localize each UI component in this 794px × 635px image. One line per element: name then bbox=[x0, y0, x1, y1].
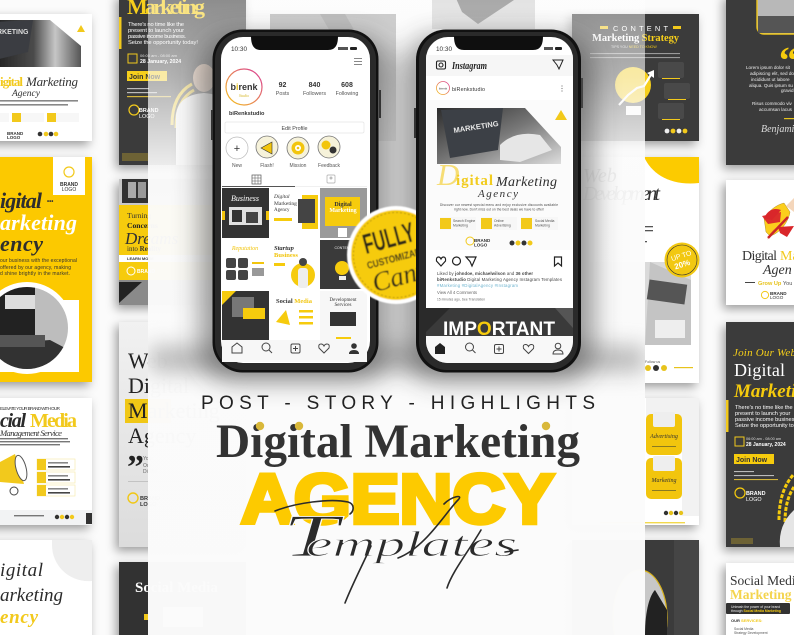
card: advertising and marketing post bbox=[572, 398, 699, 525]
card: rocket growth post: Agen bbox=[762, 263, 792, 278]
card: rocket growth post: Digital bbox=[742, 249, 777, 264]
card: rocket growth post: BRAND bbox=[770, 291, 787, 296]
badge: up to 20%: UP TO bbox=[670, 250, 693, 263]
story highlights: Mission bbox=[290, 163, 307, 169]
brand logo and social dots bbox=[466, 237, 532, 248]
card: web digital marketing agency story: ” bbox=[127, 449, 144, 486]
grid post 3: Marketing bbox=[329, 208, 357, 214]
badge: fully customizable canva: FULLY bbox=[360, 216, 418, 260]
status bar: 10:30 bbox=[231, 46, 247, 53]
card: join our webinar story: passive income busines bbox=[735, 417, 794, 423]
badge: fully customizable canva bbox=[347, 206, 445, 304]
service chips: Advertising bbox=[494, 224, 511, 228]
status bar bbox=[436, 46, 562, 51]
grid post 9: Development bbox=[330, 298, 357, 303]
faded center backdrop cards bbox=[270, 0, 535, 141]
post photo: laptop and hands: MARKETING bbox=[453, 119, 499, 135]
icon: menu bbox=[354, 58, 362, 65]
service chips: Search Engine bbox=[453, 219, 475, 223]
card: content marketing strategy post: TIPS YOU NEED TO KNOW bbox=[611, 45, 657, 49]
grid post 9: Services bbox=[335, 303, 352, 308]
post caption: Liked by johndoe, michaelwilson and 36 other bbox=[437, 271, 533, 276]
card: yellow agency story: our business with the exceptional bbox=[0, 258, 77, 264]
card: yellow agency story: ency bbox=[0, 231, 43, 256]
post caption: biRenkstudio Digital Marketing Agency Instagram Templates bbox=[437, 277, 562, 282]
phone notch bbox=[454, 36, 543, 50]
card: social media marketing story: Unleash the power of your brand bbox=[731, 605, 780, 609]
card: advertising and marketing post: Marketing bbox=[650, 478, 676, 484]
card: webinar story top: There's no time like the bbox=[128, 22, 184, 28]
card: join our webinar story: There's no time like the bbox=[735, 405, 793, 411]
card: webinar story top: present to launch your bbox=[128, 28, 184, 34]
grid post 4 bbox=[222, 240, 269, 289]
card: testimonial post: incididunt ut labore bbox=[751, 77, 790, 82]
post artwork bbox=[436, 108, 567, 246]
post body text: Discover our newest special menu and enjoy exclusive discounts available bbox=[440, 203, 558, 207]
card: webinar story top bbox=[119, 0, 246, 165]
post caption: 15 minutes ago, See Translation bbox=[437, 298, 485, 302]
post body text: right now. Don't miss out on the best deals we have to offer! bbox=[454, 208, 544, 212]
card: rocket growth post: LOGO bbox=[770, 295, 784, 300]
card: webinar story top: 06:00 am - 08:00 am bbox=[140, 53, 178, 58]
card: join our webinar story: 06:00 am - 08:00 am bbox=[746, 437, 781, 441]
grid post 6 bbox=[320, 240, 367, 289]
card: content marketing strategy post bbox=[572, 14, 699, 141]
grid post 2: Agency bbox=[274, 208, 290, 213]
post headline: D bbox=[436, 157, 459, 192]
card: web digital marketing agency story: Your bbox=[143, 456, 153, 462]
card: rocket growth post bbox=[726, 180, 794, 305]
phone: instagram profile bbox=[211, 30, 381, 372]
card: web digital marketing agency story: BRAND bbox=[140, 496, 160, 502]
profile stats: 608 bbox=[341, 82, 353, 89]
brand logo and social dots: LOGO bbox=[474, 242, 488, 248]
card: testimonial post bbox=[726, 0, 794, 165]
instagram header bar bbox=[426, 55, 573, 76]
grid post 8 bbox=[271, 291, 318, 340]
card: web digital marketing agency story: Digital bbox=[128, 373, 189, 398]
icon: yellow triangle logo bbox=[555, 110, 567, 120]
card: web digital marketing agency story: Our bbox=[143, 463, 152, 469]
card: webinar story top: passive income business. bbox=[128, 34, 186, 40]
card: join our webinar story: BRAND bbox=[746, 491, 766, 497]
phone shadows bbox=[150, 36, 645, 381]
post actions bbox=[436, 257, 562, 266]
service chips: Marketing bbox=[453, 224, 468, 228]
card: join our webinar story: 28 January, 2024 bbox=[746, 442, 786, 448]
card: web development story bbox=[572, 157, 699, 383]
card: join our webinar story bbox=[726, 322, 794, 547]
profile name: biRenkstudio bbox=[229, 111, 265, 117]
center white overlay panel bbox=[148, 0, 645, 635]
card: social media service post: Management Service bbox=[0, 428, 62, 438]
badge: fully customizable canva: CUSTOMIZABLE bbox=[366, 244, 433, 272]
grid post 5: Startup bbox=[274, 245, 295, 252]
profile stats: Posts bbox=[276, 91, 290, 97]
instagram post grid bbox=[222, 188, 367, 340]
card: white agency story: arketing bbox=[0, 585, 63, 606]
card: web digital marketing agency story: LOGO bbox=[140, 502, 157, 508]
grid post 1: Business bbox=[231, 194, 259, 203]
card: white agency story: ency bbox=[0, 607, 39, 628]
card: yellow agency story: igital bbox=[0, 188, 43, 213]
grid post 6: CONTENT bbox=[335, 246, 352, 250]
story highlights: + bbox=[234, 143, 240, 155]
status bar: 10:30 bbox=[436, 46, 452, 53]
card: webinar story top: LOGO bbox=[139, 114, 155, 120]
heading: post story highlights: POST - STORY - HIGHLIGHTS bbox=[201, 393, 595, 414]
card: web digital marketing agency story: Marketing bbox=[128, 398, 220, 423]
card: social media marketing story: Marketing bbox=[730, 587, 792, 602]
card: social media service post: cial bbox=[0, 410, 26, 432]
icon: rocket bbox=[762, 198, 794, 240]
card: turning concerns post: Concerns bbox=[127, 221, 158, 230]
edit profile button bbox=[225, 122, 364, 133]
card: social media marketing story bbox=[726, 563, 794, 635]
grid post 7 bbox=[222, 291, 269, 340]
card: social media service post: ELEVATE YOUR BRAND WITH OUR bbox=[0, 406, 61, 411]
heading: templates script: emplates bbox=[306, 524, 517, 564]
card: dark portrait post bbox=[572, 540, 699, 635]
bottom navigation bar bbox=[426, 336, 573, 363]
card: social media marketing story: Social Medi bbox=[730, 573, 794, 588]
icon: direct message bbox=[553, 60, 563, 69]
post headline: igital bbox=[456, 173, 493, 189]
card: web development story: Follow us bbox=[645, 360, 660, 364]
badge: fully customizable canva: Canva bbox=[369, 251, 445, 298]
phone: instagram post bbox=[414, 30, 583, 372]
card: yellow agency story bbox=[0, 157, 92, 382]
card: content marketing strategy post: CONTENT bbox=[613, 24, 668, 33]
card: turning concerns post: Dreams bbox=[124, 229, 179, 248]
status bar bbox=[231, 46, 357, 53]
card: turning concerns post: Turning bbox=[127, 211, 151, 220]
card: content marketing strategy post: Marketing Strategy bbox=[592, 33, 680, 44]
icon: camera bbox=[436, 61, 446, 69]
card: yellow agency story: ••• bbox=[47, 199, 53, 205]
instagram wordmark: Instagram bbox=[451, 61, 487, 72]
card: join our webinar story: Join Now bbox=[736, 457, 768, 464]
post author bbox=[436, 82, 563, 94]
story highlights bbox=[226, 136, 340, 169]
card: digital marketing agency post: Marketing bbox=[25, 74, 78, 89]
card: white agency story bbox=[0, 540, 92, 635]
card: join our webinar story: Digital bbox=[734, 360, 785, 380]
service chips: Online bbox=[494, 219, 504, 223]
panel: second column template cards bbox=[119, 0, 246, 635]
profile avatar bbox=[226, 69, 262, 105]
card: webinar story top: Seize the opportunity today! bbox=[128, 40, 198, 46]
heading: digital marketing: Digital Marketing bbox=[216, 415, 580, 468]
grid post 3 bbox=[320, 188, 367, 238]
card: social media marketing story: OUR SERVICES: bbox=[731, 618, 762, 623]
grid post 3: Digital bbox=[334, 202, 352, 208]
heading: templates script bbox=[275, 497, 518, 603]
phone notch bbox=[251, 36, 338, 50]
card: testimonial post: gravid bbox=[781, 88, 794, 93]
card: turning concerns post: BRAND bbox=[137, 269, 155, 275]
grid post 2: Marketing bbox=[274, 201, 297, 207]
grid post 8: Social Media bbox=[276, 298, 313, 305]
card: turning concerns post: LEARN MORE bbox=[127, 256, 154, 261]
card: digital marketing agency post: Agency bbox=[11, 89, 41, 99]
heading: templates script: T bbox=[283, 502, 338, 569]
card: social media marketing story: Social Media bbox=[734, 627, 754, 631]
grid post 4: Reputation bbox=[231, 246, 258, 252]
post caption: View All 4 Comments bbox=[437, 290, 477, 295]
card: web digital marketing agency story: Digital bbox=[143, 469, 157, 475]
profile tabs bbox=[222, 175, 367, 187]
panel: third column template cards bbox=[572, 14, 700, 635]
card: digital marketing agency post: LOGO bbox=[7, 135, 21, 140]
post headline: Agency bbox=[477, 188, 518, 200]
card: turning concerns post bbox=[119, 179, 246, 305]
card: yellow agency story: arketing bbox=[0, 210, 77, 235]
brand logo and social dots: BRAND bbox=[474, 238, 491, 243]
story highlights: New bbox=[232, 163, 242, 169]
grid post 9 bbox=[320, 291, 367, 340]
card: social media service post: Media bbox=[30, 410, 77, 432]
card: testimonial post: Risus commodo viv bbox=[752, 101, 793, 106]
post headline: Marketing bbox=[495, 175, 557, 190]
bottom navigation bar bbox=[222, 340, 367, 362]
profile avatar: Studio bbox=[239, 93, 249, 98]
card: testimonial post: Lorem ipsum dolor sit bbox=[746, 65, 791, 70]
card: join our webinar story: Seize the opportunity to bbox=[735, 423, 794, 429]
profile stats: 92 bbox=[279, 82, 286, 89]
important story strip: IMPORTANT bbox=[443, 319, 555, 340]
edit profile button: Edit Profile bbox=[281, 126, 308, 132]
profile avatar: birenk bbox=[230, 82, 259, 92]
card: dark social media post bbox=[119, 562, 246, 635]
card: yellow agency story: LOGO bbox=[62, 187, 76, 193]
card: social media marketing story: Strategy Development bbox=[734, 631, 768, 635]
card: yellow agency story: offered by our agency, making bbox=[0, 265, 71, 271]
post author: birenk bbox=[439, 86, 448, 90]
profile stats: 840 bbox=[309, 82, 320, 89]
card: digital marketing agency post: igital bbox=[0, 74, 23, 89]
card: advertising and marketing post: Advertising bbox=[649, 434, 678, 440]
card: webinar story top: 28 January, 2024 bbox=[140, 59, 181, 65]
card: dark social media post: Social Media bbox=[135, 580, 218, 596]
service chips bbox=[440, 218, 554, 229]
card: yellow agency story: BRAND bbox=[60, 182, 78, 188]
card: web digital marketing agency story: Web bbox=[128, 348, 168, 373]
card: join our webinar story: LOGO bbox=[746, 497, 762, 503]
grid post 1 bbox=[222, 188, 269, 238]
service chips: Social Media bbox=[535, 219, 555, 223]
post photo: laptop and hands bbox=[437, 108, 561, 164]
card: turning concerns post: into Reality bbox=[127, 245, 162, 253]
post body text bbox=[440, 203, 558, 212]
profile stats bbox=[276, 82, 358, 97]
panel: right column template cards bbox=[726, 0, 794, 635]
script flourishes bbox=[275, 497, 518, 603]
badge: up to 20% bbox=[664, 242, 700, 278]
post headline bbox=[436, 165, 557, 200]
card: rocket growth post: Grow Up You bbox=[758, 281, 792, 287]
important story strip bbox=[426, 308, 573, 336]
card: join our webinar story: present to launch your bbox=[735, 411, 790, 417]
card: social media service post bbox=[0, 398, 92, 525]
grid post 5: Business bbox=[274, 252, 298, 259]
card: testimonial post: adipiscing elit, sed do bbox=[750, 71, 794, 76]
card: webinar story top: BRAND bbox=[139, 108, 159, 114]
card: webinar story top: Join Now bbox=[129, 74, 161, 81]
card: web development story: Development bbox=[582, 183, 660, 205]
post caption bbox=[437, 271, 562, 302]
badge: up to 20%: 20% bbox=[673, 258, 691, 271]
card: yellow agency story: d shine brightly in the market. bbox=[0, 271, 70, 277]
profile stats: Following bbox=[336, 91, 358, 97]
grid post 2: Digital bbox=[273, 194, 290, 200]
profile stats: Followers bbox=[303, 91, 326, 97]
service chips: Marketing bbox=[535, 224, 550, 228]
story highlights: Flash! bbox=[260, 163, 274, 169]
card: web digital marketing agency story: Agency bbox=[128, 423, 196, 448]
card: white agency story: igital bbox=[0, 560, 43, 581]
card: testimonial post: aliqua. Quis ipsum su bbox=[749, 83, 793, 88]
grid post 2 bbox=[271, 188, 318, 238]
card: digital marketing agency post: BRAND bbox=[7, 131, 24, 136]
card: digital marketing agency post bbox=[0, 14, 92, 141]
post caption: #Marketing #DigitalAgency #Instagram bbox=[437, 283, 518, 288]
post author: biRenkstudio bbox=[452, 87, 485, 93]
card: testimonial post: accumsan lacus bbox=[759, 107, 793, 112]
card: web development story: Web bbox=[583, 165, 617, 187]
card: social media marketing story: through Social Media Marketing bbox=[731, 609, 781, 613]
card: web digital marketing agency story bbox=[119, 322, 246, 547]
heading: agency: AGENCY bbox=[241, 460, 554, 538]
grid post 5 bbox=[271, 240, 318, 289]
panel: left column template cards bbox=[0, 14, 92, 635]
story highlights: Feedback bbox=[318, 163, 340, 169]
